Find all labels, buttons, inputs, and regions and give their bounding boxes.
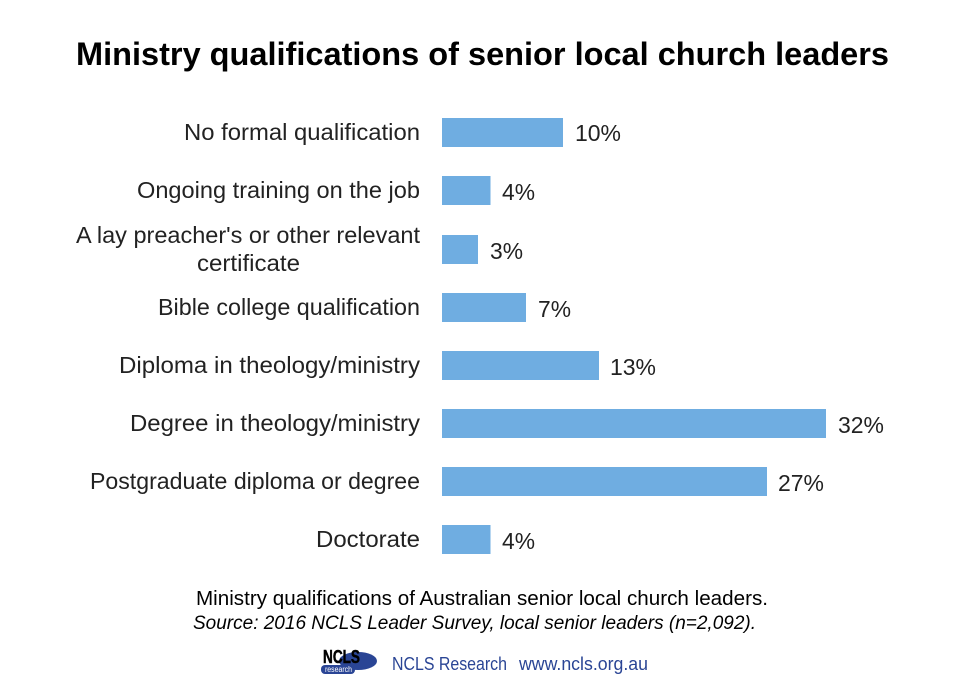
icon: NCLS research logo: NCLS xyxy=(323,647,360,667)
row: Degree in theology/ministry: Degree in theology/ministry xyxy=(130,410,421,436)
row: Postgraduate diploma or degree: 27% xyxy=(778,470,824,496)
footer: organisation and website: NCLS Research xyxy=(392,654,507,674)
row: Ongoing training on the job xyxy=(137,176,535,205)
row: A lay preacher's or other relevant certificate: 3% xyxy=(490,238,523,264)
caption: Ministry qualifications of Australian senior local church leaders. xyxy=(196,588,768,610)
row: No formal qualification: No formal qualification xyxy=(184,119,420,145)
row: Ongoing training on the job: Ongoing training on the job xyxy=(137,177,420,203)
bar chart xyxy=(76,118,884,554)
row: Doctorate xyxy=(316,525,535,554)
row: A lay preacher's or other relevant certificate: certificate xyxy=(197,250,300,276)
title: Ministry qualifications of senior local church leaders xyxy=(76,36,889,72)
row: Ongoing training on the job: 4% xyxy=(502,179,535,205)
row: No formal qualification xyxy=(184,118,621,147)
row: Postgraduate diploma or degree: Postgraduate diploma or degree xyxy=(90,468,420,494)
row: Degree in theology/ministry: 32% xyxy=(838,412,884,438)
row: Bible college qualification: 7% xyxy=(538,296,571,322)
row: Degree in theology/ministry xyxy=(130,409,884,438)
row: Bible college qualification: Bible college qualification xyxy=(158,294,420,320)
icon: NCLS research logo: research xyxy=(325,665,352,674)
row: Diploma in theology/ministry: Diploma in theology/ministry xyxy=(119,352,421,378)
row: A lay preacher's or other relevant certificate: A lay preacher's or other relevant xyxy=(76,222,421,248)
footer: organisation and website: www.ncls.org.au xyxy=(518,654,648,674)
row: No formal qualification: 10% xyxy=(575,120,621,146)
row: Doctorate: Doctorate xyxy=(316,526,420,552)
icon: NCLS research logo xyxy=(321,647,377,674)
row: Bible college qualification xyxy=(158,293,571,322)
source note: Source: 2016 NCLS Leader Survey, local senior leaders (n=2,092). xyxy=(193,613,756,634)
footer: organisation and website xyxy=(392,654,648,674)
row: Postgraduate diploma or degree xyxy=(90,467,824,496)
row: Diploma in theology/ministry xyxy=(119,351,656,380)
row: A lay preacher's or other relevant certificate xyxy=(76,222,523,276)
row: Diploma in theology/ministry: 13% xyxy=(610,354,656,380)
row: Doctorate: 4% xyxy=(502,528,535,554)
